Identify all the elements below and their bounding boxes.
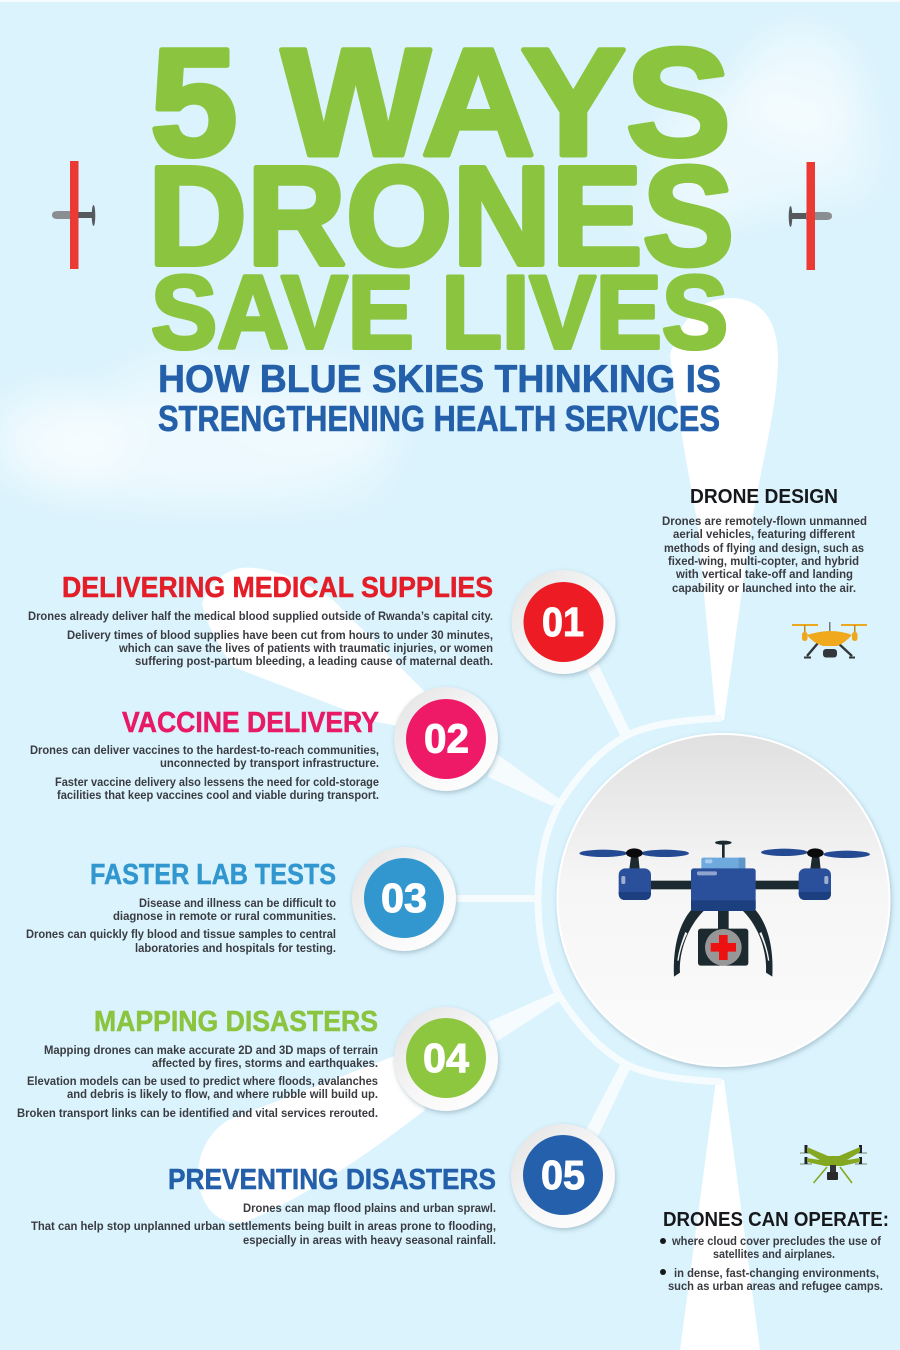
panel: drone design — [662, 486, 867, 595]
panel: drones can operate — [660, 1209, 889, 1293]
subtitle: HOW BLUE SKIES THINKING IS — [158, 358, 721, 401]
title — [148, 17, 734, 371]
panel: drone design: methods of flying and design, such as — [664, 541, 864, 555]
connector ring — [538, 718, 722, 1082]
panel: faster lab tests: laboratories and hospitals for testing. — [135, 941, 336, 955]
panel: vaccine delivery — [30, 707, 379, 802]
badge 04: 04 — [423, 1035, 469, 1081]
panel: drones can operate: DRONES CAN OPERATE: — [663, 1209, 889, 1231]
title: SAVE LIVES — [151, 255, 728, 371]
icon: left red plane — [52, 161, 95, 269]
panel: preventing disasters — [31, 1164, 496, 1247]
top edge — [0, 0, 900, 2]
panel: mapping disasters: MAPPING DISASTERS — [94, 1006, 378, 1038]
icon: medical drone — [579, 841, 870, 977]
badge 01 — [512, 570, 616, 674]
badge 03 — [352, 847, 456, 951]
panel: delivering medical supplies: Drones already deliver half the medical blood supplied outside of Rwanda’s capital city. — [28, 609, 493, 623]
badge 02: 02 — [424, 716, 469, 762]
subtitle: STRENGTHENING HEALTH SERVICES — [158, 398, 720, 439]
panel: delivering medical supplies: which can save the lives of patients with traumatic injuries, or women — [118, 641, 493, 655]
panel: mapping disasters: and debris is likely to flow, and where rubble will build up. — [67, 1087, 378, 1101]
panel: drone design: fixed-wing, multi-copter, and hybrid — [668, 554, 859, 568]
panel: preventing disasters: Drones can map flood plains and urban sprawl. — [243, 1201, 496, 1215]
subtitle — [158, 358, 721, 439]
connectors to numbered circles — [450, 664, 632, 1136]
panel: drone design: capability or launched into the air. — [672, 581, 856, 595]
panel: delivering medical supplies: DELIVERING MEDICAL SUPPLIES — [62, 572, 493, 604]
panel: vaccine delivery: Faster vaccine delivery also lessens the need for cold-storage — [55, 775, 379, 789]
title: DRONES — [148, 136, 734, 294]
panel: vaccine delivery: facilities that keep vaccines cool and viable during transport. — [57, 788, 379, 802]
panel: delivering medical supplies: Delivery times of blood supplies have been cut from hours to under 30 minutes, — [67, 628, 493, 642]
panel: drones can operate: satellites and airplanes. — [713, 1247, 835, 1261]
panel: drones can operate: in dense, fast-changing environments, — [674, 1266, 879, 1280]
badge 05: 05 — [541, 1152, 585, 1198]
panel: drone design: DRONE DESIGN — [690, 486, 838, 508]
panel: vaccine delivery: Drones can deliver vaccines to the hardest-to-reach communities, — [30, 743, 379, 757]
badge 02 — [394, 687, 498, 791]
badge 05 — [511, 1124, 615, 1228]
panel: drone design: Drones are remotely-flown unmanned — [662, 514, 867, 528]
panel: preventing disasters: PREVENTING DISASTERS — [168, 1164, 496, 1196]
icon: yellow drone — [792, 622, 867, 658]
panel: drone design: with vertical take-off and landing — [675, 567, 853, 581]
panel: vaccine delivery: VACCINE DELIVERY — [122, 707, 379, 739]
icon: green drone — [800, 1145, 867, 1183]
panel: faster lab tests: FASTER LAB TESTS — [90, 859, 336, 891]
clouds — [0, 30, 880, 513]
panel: mapping disasters: Mapping drones can make accurate 2D and 3D maps of terrain — [44, 1043, 378, 1057]
panel: preventing disasters: especially in areas with heavy seasonal rainfall. — [243, 1233, 496, 1247]
panel: mapping disasters: Elevation models can be used to predict where floods, avalanches — [27, 1074, 378, 1088]
badge 01: 01 — [542, 599, 584, 645]
icon: right red plane — [789, 162, 832, 270]
central disc — [558, 734, 890, 1066]
title: 5 WAYS — [150, 17, 731, 188]
panel: delivering medical supplies: suffering post-partum bleeding, a leading cause of maternal death. — [135, 654, 493, 668]
badge 03: 03 — [381, 875, 427, 921]
panel: mapping disasters: Broken transport links can be identified and vital services rerouted. — [17, 1106, 378, 1120]
panel: preventing disasters: That can help stop unplanned urban settlements being built in areas prone to flooding, — [31, 1219, 496, 1233]
panel: faster lab tests: diagnose in remote or rural communities. — [113, 909, 336, 923]
panel: faster lab tests — [26, 859, 336, 955]
badge 04 — [394, 1007, 498, 1111]
panel: delivering medical supplies — [28, 572, 493, 668]
panel: mapping disasters — [17, 1006, 378, 1120]
white vapour trails — [198, 298, 778, 1350]
panel: faster lab tests: Drones can quickly fly blood and tissue samples to central — [26, 927, 336, 941]
panel: mapping disasters: affected by fires, storms and earthquakes. — [152, 1056, 378, 1070]
panel: drone design: aerial vehicles, featuring different — [673, 527, 855, 541]
panel: drones can operate: where cloud cover precludes the use of — [671, 1234, 882, 1248]
panel: vaccine delivery: unconnected by transport infrastructure. — [160, 756, 379, 770]
panel: faster lab tests: Disease and illness can be difficult to — [139, 896, 336, 910]
